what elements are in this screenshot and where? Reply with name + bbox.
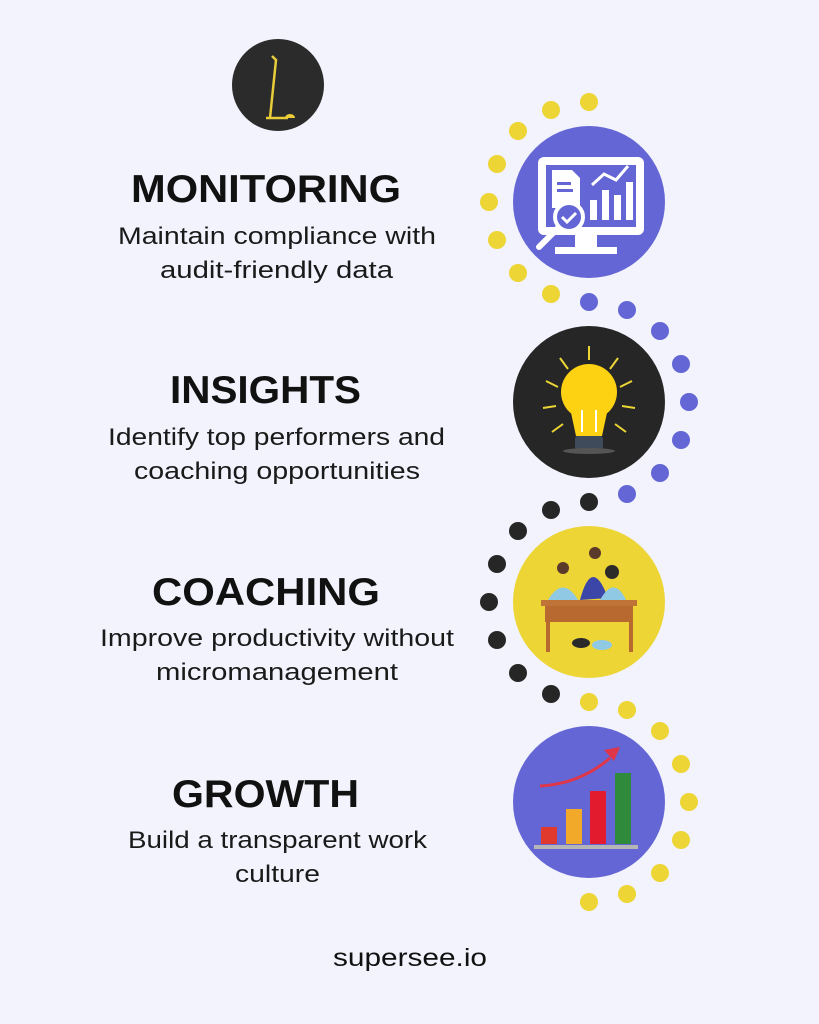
text: monitoring description: Maintain compliance with: [118, 223, 436, 250]
text: coaching description: Improve productivity without: [100, 625, 454, 652]
text: growth description: culture: [235, 861, 320, 888]
heading: insights: INSIGHTS: [170, 369, 361, 412]
text: monitoring description: [118, 223, 436, 284]
footer: website: supersee.io: [333, 944, 487, 972]
dots arc: monitoring (yellow): [480, 93, 598, 303]
heading: monitoring: MONITORING: [131, 168, 401, 211]
icon: light bulb: [513, 326, 665, 478]
dots arc: growth (yellow): [580, 693, 698, 911]
heading: growth: GROWTH: [172, 773, 359, 816]
text: coaching description: micromanagement: [156, 659, 398, 686]
text: insights description: Identify top performers and: [108, 424, 445, 451]
heading: coaching: COACHING: [152, 571, 380, 614]
dots arc: coaching (black): [480, 493, 598, 703]
icon: growth bar chart: [513, 726, 665, 878]
text: insights description: coaching opportunities: [134, 458, 420, 485]
icon: coaching team: [513, 526, 665, 678]
dots arc: insights (blue): [580, 293, 698, 503]
text: insights description: [108, 424, 445, 485]
text: growth description: [128, 827, 428, 888]
text: monitoring description: audit-friendly data: [160, 257, 394, 284]
text: coaching description: [100, 625, 454, 686]
text: growth description: Build a transparent work: [128, 827, 428, 854]
logo: [232, 39, 324, 131]
icon: monitor with charts: [513, 126, 665, 278]
